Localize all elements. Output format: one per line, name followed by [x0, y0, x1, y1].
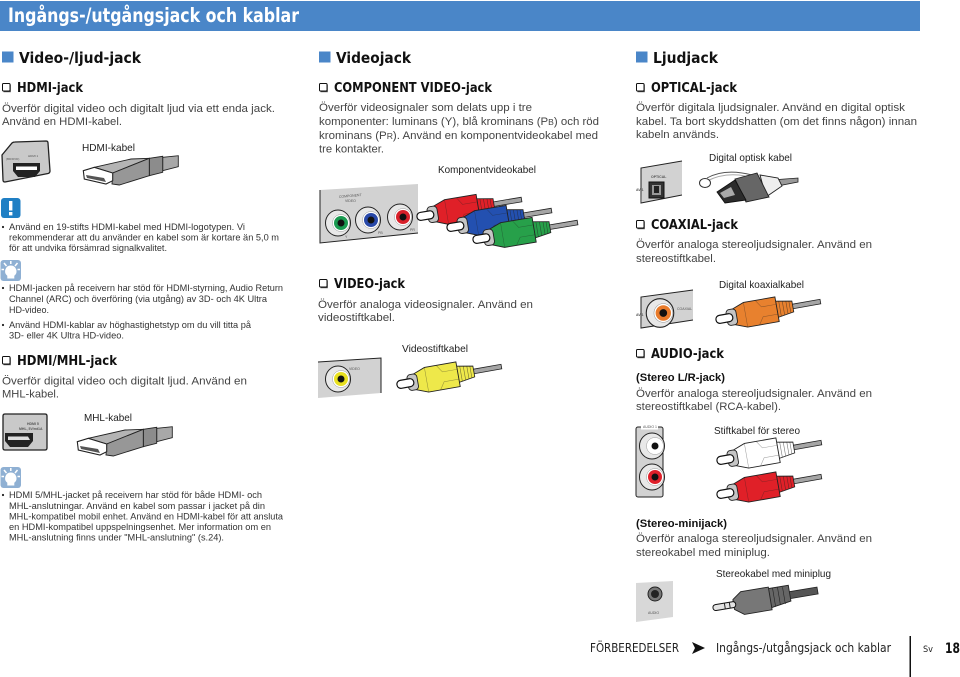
tip text: MHL: MHL-anslutning finns under "MHL-anslutning" (s.24).: [9, 532, 224, 542]
tip text: MHL: [2, 490, 284, 542]
notice text: [2, 222, 279, 253]
text: video description: videostiftkabel.: [318, 312, 395, 324]
subheading: OPTICAL-jack: OPTICAL-jack: [651, 81, 737, 96]
text: stereo L/R description: stereostiftkabel (RCA-kabel).: [636, 401, 781, 413]
subheading: AUDIO-jack: AUDIO-jack: [651, 347, 724, 362]
notice text: för att undvika försämrad signalkvalitet.: [9, 243, 167, 253]
illustration: video port panel: [318, 358, 381, 398]
text: component description: tre kontakter.: [319, 144, 384, 156]
text: stereo L/R description: (Stereo L/R-jack): [636, 372, 725, 384]
column: Video-/ljud-jack: [0, 49, 284, 542]
section heading: Video-/ljud-jack: Video-/ljud-jack: [19, 49, 142, 67]
text: optical description: Överför digitala ljudsignaler. Använd en digital optisk: [636, 102, 905, 114]
icon: tip bulb 2: [0, 467, 21, 488]
footer language and page number: Sv: [923, 645, 933, 655]
tip text: MHL: HDMI 5/MHL-jacket på receivern har stöd för både HDMI- och: [9, 490, 262, 500]
illustration: component port panel: PB: [378, 231, 383, 235]
subheading: VIDEO-jack: VIDEO-jack: [334, 277, 405, 292]
illustration: stereo port panel: AUDIO 1: [643, 425, 657, 429]
illustration: video port panel: VIDEO: [349, 367, 360, 371]
illustration: component port panel: Y: [345, 235, 348, 239]
tip text: MHL: MHL-kompatibel mobil enhet. Använd en HDMI-kabel för att ansluta: [9, 512, 284, 522]
text: MHL description: Överför digital video och digitalt ljud. Använd en: [2, 376, 247, 388]
arrow: [692, 642, 705, 654]
text: MHL description: MHL-kabel.: [2, 388, 59, 400]
text: component description: komponenter: luminans (Y), blå krominans (P B) och röd: [319, 116, 599, 128]
label: HDMI-kabel: HDMI-kabel: [82, 143, 135, 154]
notice text: rekommenderar att du använder en kabel som är kortare än 5,0 m: [9, 232, 279, 242]
illustration: component port panel: VIDEO: [345, 199, 356, 203]
footer divider: [910, 636, 911, 677]
subheading: HDMI-jack: HDMI-jack: [17, 81, 83, 96]
text: coaxial description: [636, 239, 872, 265]
illustration: minijack port panel: [636, 581, 673, 622]
text: HDMI description: Använd en HDMI-kabel.: [2, 116, 122, 128]
text: optical description: kabel. Ta bort skyddshatten (om det finns någon) innan: [636, 116, 917, 128]
text: coaxial description: stereostiftkabel.: [636, 253, 716, 265]
tip text: HDMI: 3D- eller 4K Ultra HD-video.: [9, 330, 124, 340]
label: Stiftkabel för stereo: Stiftkabel för stereo: [714, 426, 800, 437]
section heading: Ljudjack: Ljudjack: [653, 49, 719, 67]
illustration: coaxial port panel: [636, 290, 693, 328]
text: video description: [318, 299, 533, 324]
illustration: HDMI port panel: [2, 141, 50, 182]
illustration: component port panel: COMPONENT: [339, 193, 363, 199]
tip text: HDMI: [2, 283, 283, 340]
header bar: [0, 1, 920, 31]
tip text: HDMI: HD-video.: [9, 305, 49, 315]
text: component description: [319, 102, 599, 156]
illustration: miniplug: [711, 579, 819, 619]
illustration: component port panel: [320, 184, 418, 243]
text: coaxial description: Överför analoga stereoljudsignaler. Använd en: [636, 239, 872, 251]
subheading: COAXIAL-jack: COAXIAL-jack: [651, 218, 738, 233]
text: optical description: kabeln används.: [636, 129, 719, 141]
notice icon: [1, 198, 20, 218]
footer breadcrumb: FÖRBEREDELSER: [590, 639, 679, 655]
footer breadcrumb: [590, 639, 891, 655]
text: stereo minijack description: Överför analoga stereoljudsignaler. Använd en: [636, 533, 872, 545]
text: HDMI description: Överför digital video och digitalt ljud via ett enda jack.: [2, 103, 275, 115]
illustration: MHL port panel: MHL, 5V/mt1A: [19, 427, 43, 431]
illustration: MHL cable: [77, 427, 172, 456]
illustration: optical plug: [700, 172, 798, 203]
label: Videostiftkabel: Videostiftkabel: [402, 344, 468, 355]
icon: tip bulb: [0, 260, 21, 281]
text: video description: Överför analoga videosignaler. Använd en: [318, 299, 533, 311]
illustration: component port panel: PR: [410, 228, 415, 232]
text: MHL description: [2, 376, 247, 400]
text: HDMI description: [2, 103, 275, 128]
label: Stereokabel med miniplug: Stereokabel med miniplug: [716, 569, 831, 580]
label: Digital koaxialkabel: Digital koaxialkabel: [719, 280, 804, 291]
label: Komponentvideokabel: Komponentvideokabel: [438, 165, 536, 176]
illustration: HDMI port panel: HDMI 1: [28, 154, 38, 158]
text: stereo L/R description: Överför analoga stereoljudsignaler. Använd en: [636, 388, 872, 400]
text: optical description: [636, 102, 917, 141]
tip text: MHL: en HDMI-kompatibel uppspelningsenhet. Mer information om en: [9, 522, 271, 532]
footer language and page number: [923, 641, 960, 657]
footer breadcrumb: Ingångs-/utgångsjack och kablar: [716, 640, 891, 655]
text: stereo L/R description: [636, 372, 872, 413]
illustration: MHL port panel: [3, 414, 47, 450]
column: Videojack: [318, 49, 599, 398]
label: Digital optisk kabel: Digital optisk kabel: [709, 153, 792, 164]
label: MHL-kabel: MHL-kabel: [84, 413, 132, 424]
text: component description: krominans (PR). Använd en komponentvideokabel med: [319, 130, 598, 142]
text: stereo minijack description: (Stereo-minijack): [636, 518, 727, 530]
illustration: HDMI cable: [83, 156, 178, 185]
illustration: coaxial port panel: AV 1: [636, 313, 644, 317]
tip text: HDMI: Channel (ARC) och överföring (via utgång) av 3D- och 4K Ultra: [9, 294, 268, 304]
illustration: stereo port panel: [636, 424, 664, 497]
illustration: optical port panel: AV 1: [636, 188, 644, 192]
illustration: component plugs: [415, 187, 580, 252]
tip text: MHL: MHL-anslutningar. Använd en kabel som passar i jacket på din: [9, 501, 265, 511]
notice text: Använd en 19-stifts HDMI-kabel med HDMI-logotypen. Vi: [9, 222, 245, 232]
title: Ingångs-/utgångsjack och kablar: [8, 3, 299, 27]
section heading: Videojack: Videojack: [336, 49, 412, 67]
subheading: HDMI/MHL-jack: HDMI/MHL-jack: [17, 354, 117, 369]
illustration: minijack port panel: AUDIO: [648, 611, 659, 615]
text: component description: Överför videosignaler som delats upp i tre: [319, 102, 532, 114]
text: stereo minijack description: [636, 518, 872, 559]
illustration: MHL port panel: HDMI 5: [27, 422, 39, 426]
illustration: coaxial port panel: COAXIAL: [677, 307, 692, 311]
illustration: HDMI port panel: (BD/DVD): [6, 157, 19, 161]
illustration: optical port panel: OPTICAL: [651, 175, 667, 179]
tip text: HDMI: Använd HDMI-kablar av höghastighetstyp om du vill titta på: [9, 320, 252, 330]
illustration: stereo plugs: [715, 430, 824, 507]
illustration: optical port panel: [636, 161, 682, 203]
column: Ljudjack: [636, 49, 917, 622]
text: stereo minijack description: stereokabel med miniplug.: [636, 547, 770, 559]
illustration: yellow plug: [395, 354, 504, 397]
illustration: orange plug: [714, 289, 823, 332]
subheading: COMPONENT VIDEO-jack: COMPONENT VIDEO-jack: [334, 81, 492, 96]
tip text: HDMI: HDMI-jacken på receivern har stöd för HDMI-styrning, Audio Return: [9, 283, 283, 293]
